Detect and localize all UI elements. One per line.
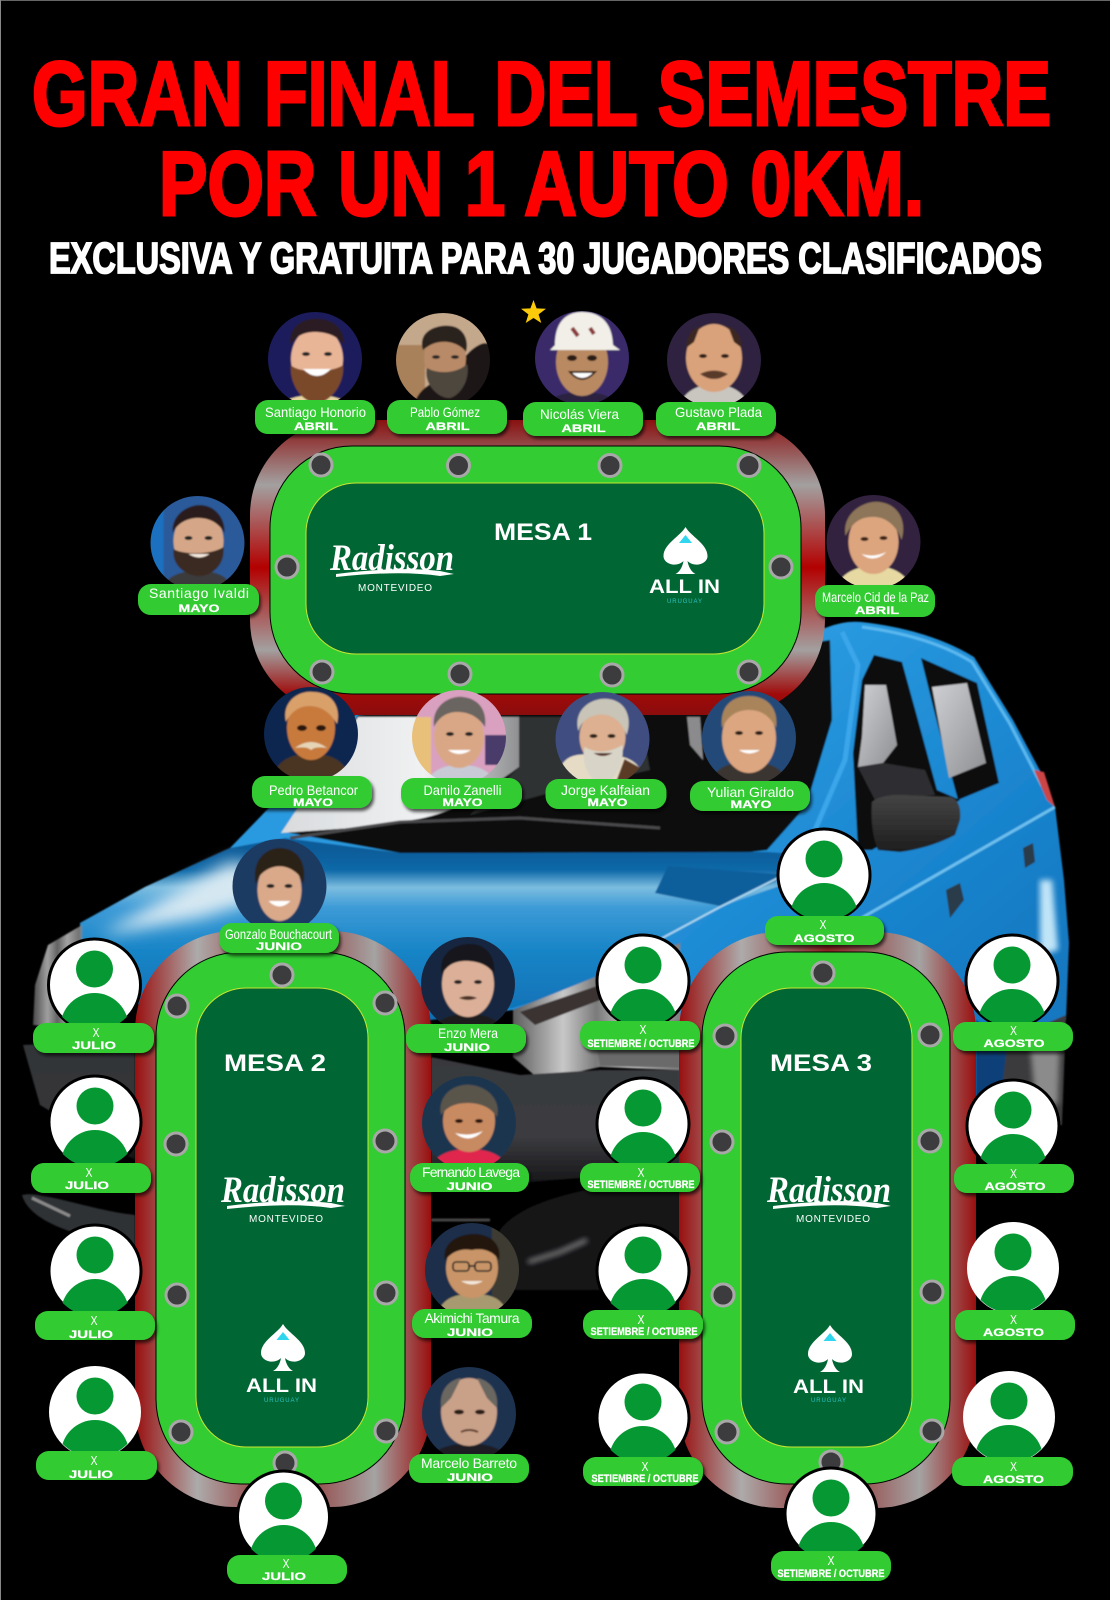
name label: Yulian Giraldo: [707, 784, 794, 800]
placeholder avatar: [237, 1470, 330, 1555]
name label: JUNIO: [256, 941, 303, 953]
name label: JUNIO: [447, 1472, 494, 1484]
placeholder avatar: [597, 935, 689, 1057]
logo: All In Uruguay: ALL IN: [649, 577, 720, 598]
photo: Yulian Giraldo: [701, 690, 797, 786]
right side lower panel: [976, 1020, 1010, 1110]
label: JULIO: [262, 1571, 307, 1583]
side mirror: [872, 795, 960, 852]
label: X: [1010, 1023, 1017, 1038]
seat: Nicolás Viera: [523, 310, 643, 436]
label: AGOSTO: [983, 1474, 1045, 1486]
label: AGOSTO: [984, 1181, 1046, 1193]
label: SETIEMBRE / OCTUBRE: [778, 1568, 884, 1580]
name label: Fernando Lavega: [422, 1164, 520, 1180]
left bumper: [23, 1040, 135, 1160]
hood: [80, 838, 858, 1020]
table rim: [135, 931, 431, 1507]
car body: [80, 622, 1069, 1110]
empty seat: X JULIO 1: [33, 939, 154, 1061]
name label: MAYO: [442, 797, 483, 809]
placeholder avatar: [597, 1372, 689, 1494]
front pillar highlight: [785, 632, 858, 856]
label: [35, 1311, 155, 1341]
photo: Akimichi Tamura: [425, 1223, 519, 1309]
seat: Danilo Zanelli: [401, 689, 522, 809]
photo: Marcelo Barreto: [422, 1367, 516, 1454]
label: JULIO: [69, 1329, 114, 1341]
placeholder avatar: [967, 1222, 1059, 1344]
panel: MESA 2 table: [135, 931, 431, 1507]
heading: MESA 3: MESA 3: [770, 1050, 872, 1077]
front side window: [853, 655, 960, 850]
photo: Gustavo Plada: [666, 312, 762, 408]
label: AGOSTO: [983, 1327, 1045, 1339]
empty seat: X JULIO bottom: [227, 1471, 347, 1593]
placeholder avatar: [597, 1078, 689, 1200]
label: SETIEMBRE / OCTUBRE: [590, 1326, 698, 1338]
logo: All In Uruguay: ALL IN: [246, 1376, 317, 1397]
empty seat: X AGOSTO 4: [952, 1371, 1073, 1493]
placeholder avatar: [778, 829, 870, 951]
seat markers: [711, 962, 943, 1473]
empty seat: X AGOSTO 2: [954, 1080, 1074, 1202]
empty seat: X AGOSTO 1: [953, 935, 1073, 1057]
seat: Pablo Gómez: [387, 312, 507, 434]
label: X: [282, 1556, 290, 1571]
name label: [546, 779, 666, 809]
photo: Marcelo Cid de la Paz: [826, 494, 922, 590]
label: [583, 1310, 703, 1339]
seat: Pedro Betancor: [252, 686, 372, 809]
title line 2: POR UN 1 AUTO 0KM.: [159, 134, 924, 235]
seat: Yulian Giraldo: [690, 690, 810, 811]
heading: MESA 2: MESA 2: [224, 1050, 326, 1077]
name label: Enzo Mera: [438, 1025, 498, 1041]
name label: Gonzalo Bouchacourt: [225, 926, 332, 942]
photo: Nicolás Viera: [535, 311, 629, 402]
label: [31, 1163, 151, 1193]
door crease: [858, 807, 1055, 920]
seat markers: [165, 964, 397, 1474]
name label: [690, 781, 810, 811]
label: SETIEMBRE / OCTUBRE: [588, 1179, 694, 1191]
label: [36, 1451, 157, 1481]
name label: ABRIL: [855, 605, 899, 617]
name label: [410, 1163, 529, 1193]
name label: [401, 778, 522, 809]
empty seat: X JULIO 2: [31, 1076, 151, 1198]
background image: blue car: [22, 622, 1069, 1290]
label: [771, 1551, 891, 1581]
panel: MESA 1 table: [250, 420, 825, 715]
placeholder avatar: [47, 938, 142, 1023]
seat: Gustavo Plada: [656, 312, 776, 436]
name label: Gustavo Plada: [675, 404, 762, 420]
name label: JUNIO: [447, 1327, 494, 1339]
logo: Radisson Montevideo: Radisson: [329, 538, 454, 579]
label: [955, 1310, 1075, 1340]
label: X: [1010, 1312, 1017, 1327]
label: X: [92, 1025, 100, 1040]
photo: Enzo Mera: [421, 937, 515, 1024]
label: JULIO: [72, 1040, 117, 1052]
label: [953, 1022, 1073, 1051]
name label: [412, 1309, 532, 1339]
placeholder avatar: [963, 1371, 1055, 1493]
seat: Gonzalo Bouchacourt: [219, 838, 339, 953]
logo: All In Uruguay: URUGUAY: [264, 1398, 299, 1404]
seat markers: [276, 454, 792, 686]
logo: Radisson Montevideo: [766, 1170, 891, 1225]
name label: ABRIL: [294, 421, 338, 433]
placeholder avatar: [49, 1366, 141, 1451]
roof highlight: [862, 627, 1042, 786]
label: X: [86, 1165, 93, 1180]
heading: MESA 1: MESA 1: [494, 519, 592, 546]
seat: Jorge Kalfaian: [546, 691, 666, 809]
label: SETIEMBRE / OCTUBRE: [588, 1038, 694, 1050]
photo: Santiago Honorio: [268, 312, 362, 400]
name label: [523, 402, 643, 436]
logo: Radisson Montevideo: [329, 538, 454, 594]
seat: Marcelo Barreto: [409, 1366, 529, 1484]
label: X: [640, 1022, 647, 1037]
name label: [252, 776, 372, 809]
icon: gold star: [521, 300, 546, 323]
label: [765, 916, 884, 945]
logo: Radisson Montevideo: MONTEVIDEO: [249, 1214, 323, 1225]
name label: ABRIL: [562, 423, 606, 435]
photo: Danilo Zanelli: [412, 690, 506, 778]
name label: Akimichi Tamura: [424, 1310, 520, 1326]
table rim: [250, 420, 825, 715]
empty seat: X SETIEMBRE / OCTUBRE 4: [583, 1372, 703, 1494]
windshield reflection: [281, 717, 519, 833]
seat: Marcelo Cid de la Paz: [815, 494, 935, 617]
label: X: [642, 1459, 649, 1474]
door handles: [946, 883, 964, 918]
right headlight: [513, 943, 680, 1080]
name label: JUNIO: [444, 1042, 491, 1054]
logo: Radisson Montevideo: MONTEVIDEO: [358, 583, 432, 594]
seat: Akimichi Tamura: [412, 1222, 532, 1339]
left headlight: [33, 925, 82, 1030]
centre bumper: [431, 1057, 680, 1190]
rail: [702, 952, 950, 1484]
placeholder avatar: [597, 1225, 689, 1347]
tail light: [1034, 770, 1055, 807]
empty seat: X JULIO 4: [36, 1366, 157, 1488]
label: X: [1010, 1459, 1017, 1474]
logo: All In Uruguay: URUGUAY: [667, 599, 702, 605]
seat: Santiago Ivaldi: [138, 495, 259, 615]
label: X: [90, 1313, 98, 1328]
placeholder avatar: [49, 1074, 142, 1163]
rear side window: [921, 658, 999, 800]
felt: [196, 988, 368, 1447]
placeholder avatar: [50, 1224, 142, 1311]
empty seat: X SETIEMBRE / OCTUBRE bottom: [771, 1468, 891, 1590]
rail: [156, 952, 405, 1484]
logo: All In Uruguay: URUGUAY: [811, 1398, 846, 1404]
placeholder avatar: [966, 935, 1058, 1057]
name label: MAYO: [178, 603, 220, 615]
placeholder avatar: [785, 1468, 877, 1590]
logo: Radisson Montevideo: MONTEVIDEO: [796, 1214, 870, 1225]
label: X: [828, 1553, 835, 1568]
empty seat: X SETIEMBRE / OCTUBRE 1: [580, 935, 700, 1057]
photo: Pablo Gómez: [396, 313, 490, 400]
name label: [138, 584, 259, 615]
name label: [387, 400, 507, 434]
name label: Marcelo Barreto: [421, 1455, 517, 1471]
label: [583, 1457, 703, 1486]
label: X: [820, 917, 827, 932]
empty seat: X AGOSTO 3: [955, 1222, 1075, 1344]
label: AGOSTO: [984, 1038, 1045, 1050]
windshield: [285, 640, 832, 858]
label: [580, 1163, 700, 1192]
name label: [406, 1024, 526, 1054]
seat: Enzo Mera: [406, 936, 526, 1054]
label: X: [90, 1453, 98, 1468]
empty seat: X JULIO 3: [35, 1225, 155, 1347]
photo: Fernando Lavega: [422, 1076, 516, 1163]
table rim: [679, 932, 976, 1508]
label: [580, 1021, 700, 1050]
felt: [741, 988, 912, 1447]
name label: Pedro Betancor: [269, 782, 358, 798]
name label: [815, 585, 935, 617]
label: [227, 1555, 347, 1584]
logo: Radisson Montevideo: Radisson: [766, 1170, 891, 1211]
name label: Pablo Gómez: [410, 404, 480, 420]
name label: Marcelo Cid de la Paz: [822, 589, 929, 605]
photo: Jorge Kalfaian: [556, 692, 650, 779]
label: [952, 1457, 1073, 1486]
label: JULIO: [69, 1469, 114, 1481]
photo: Pedro Betancor: [263, 686, 359, 782]
label: X: [638, 1165, 645, 1180]
name label: MAYO: [730, 799, 772, 811]
name label: MAYO: [293, 797, 334, 809]
empty seat: X SETIEMBRE / OCTUBRE 2: [580, 1078, 700, 1200]
label: JULIO: [65, 1180, 110, 1192]
name label: Nicolás Viera: [540, 406, 619, 422]
seat: Fernando Lavega: [410, 1075, 529, 1193]
label: [954, 1164, 1074, 1193]
label: AGOSTO: [794, 933, 855, 945]
label: X: [638, 1312, 645, 1327]
felt: [306, 483, 764, 654]
logo: All In Uruguay: [793, 1325, 864, 1404]
photo: Gonzalo Bouchacourt: [232, 839, 326, 923]
door highlight: [1040, 880, 1058, 955]
panel: MESA 3 table: [679, 932, 976, 1508]
title: [32, 44, 1051, 283]
label: X: [1010, 1166, 1017, 1181]
seat: Santiago Honorio: [255, 311, 375, 434]
name label: MAYO: [588, 797, 628, 809]
label: SETIEMBRE / OCTUBRE: [592, 1473, 698, 1485]
name label: Danilo Zanelli: [424, 782, 502, 798]
name label: Santiago Ivaldi: [149, 585, 249, 601]
logo: All In Uruguay: [649, 527, 720, 605]
name label: [656, 402, 776, 436]
photo: Santiago Ivaldi: [150, 496, 244, 584]
name label: Jorge Kalfaian: [561, 782, 650, 798]
logo: Radisson Montevideo: Radisson: [220, 1170, 345, 1211]
name label: [409, 1454, 529, 1484]
label: [33, 1023, 154, 1053]
empty seat: X AGOSTO top: [765, 829, 884, 951]
name label: ABRIL: [426, 421, 470, 433]
placeholder avatar: [967, 1080, 1059, 1202]
name label: Santiago Honorio: [265, 404, 366, 420]
empty seat: X SETIEMBRE / OCTUBRE 3: [583, 1225, 703, 1347]
logo: All In Uruguay: [246, 1324, 317, 1404]
name label: [255, 400, 375, 434]
logo: All In Uruguay: ALL IN: [793, 1377, 864, 1398]
rail: [270, 446, 801, 694]
name label: ABRIL: [696, 421, 740, 433]
logo: Radisson Montevideo: [220, 1170, 345, 1225]
name label: JUNIO: [446, 1181, 493, 1193]
name label: [219, 923, 339, 953]
